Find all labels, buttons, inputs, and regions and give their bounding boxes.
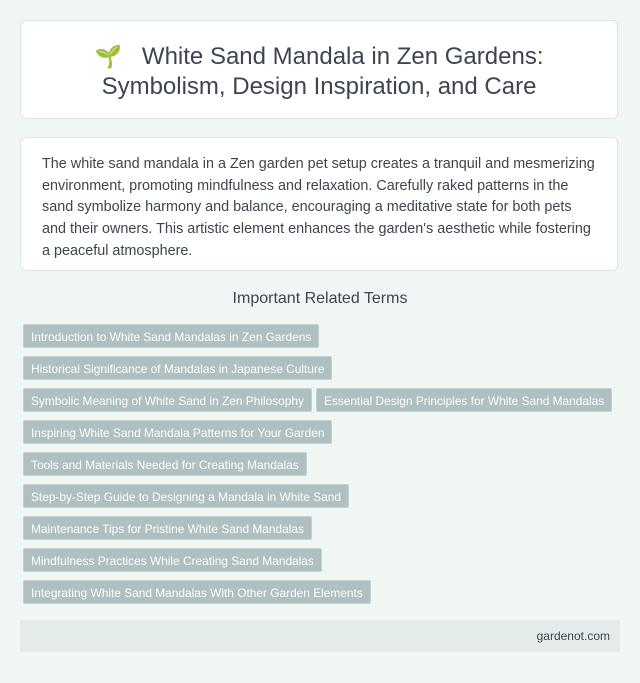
tags list: Maintenance Tips for Pristine White Sand Mandalas — [31, 522, 304, 536]
tags list: Mindfulness Practices While Creating Sand Mandalas — [31, 554, 314, 568]
tags list: Integrating White Sand Mandalas With Other Garden Elements — [31, 586, 363, 600]
title: Symbolism, Design Inspiration, and Care — [102, 73, 536, 100]
tags list: Symbolic Meaning of White Sand in Zen Philosophy — [31, 394, 304, 408]
title — [20, 20, 618, 119]
tags list: Essential Design Principles for White Sand Mandalas — [324, 394, 604, 408]
heading: related terms: Important Related Terms — [233, 290, 407, 307]
description: The white sand mandala in a Zen garden pet setup creates a tranquil and mesmerizing environment, promoting mindfulness and relaxation. Carefully raked patterns in the sand symbolize harmony and balance, encouraging a meditative state for both pets and their owners. This artistic element enhances the garden's aesthetic while fostering a peaceful atmosphere. — [42, 156, 595, 259]
tags list: Historical Significance of Mandalas in Japanese Culture — [31, 362, 324, 376]
tags list: Inspiring White Sand Mandala Patterns for Your Garden — [31, 426, 324, 440]
footer — [20, 620, 620, 652]
footer: gardenot.com — [537, 629, 610, 643]
title: 🌱 White Sand Mandala in Zen Gardens: — [95, 43, 543, 70]
tags list: Step-by-Step Guide to Designing a Mandala in White Sand — [31, 490, 341, 504]
tags list — [23, 324, 612, 604]
tags list: Introduction to White Sand Mandalas in Zen Gardens — [31, 330, 311, 344]
tags list: Tools and Materials Needed for Creating Mandalas — [31, 458, 299, 472]
